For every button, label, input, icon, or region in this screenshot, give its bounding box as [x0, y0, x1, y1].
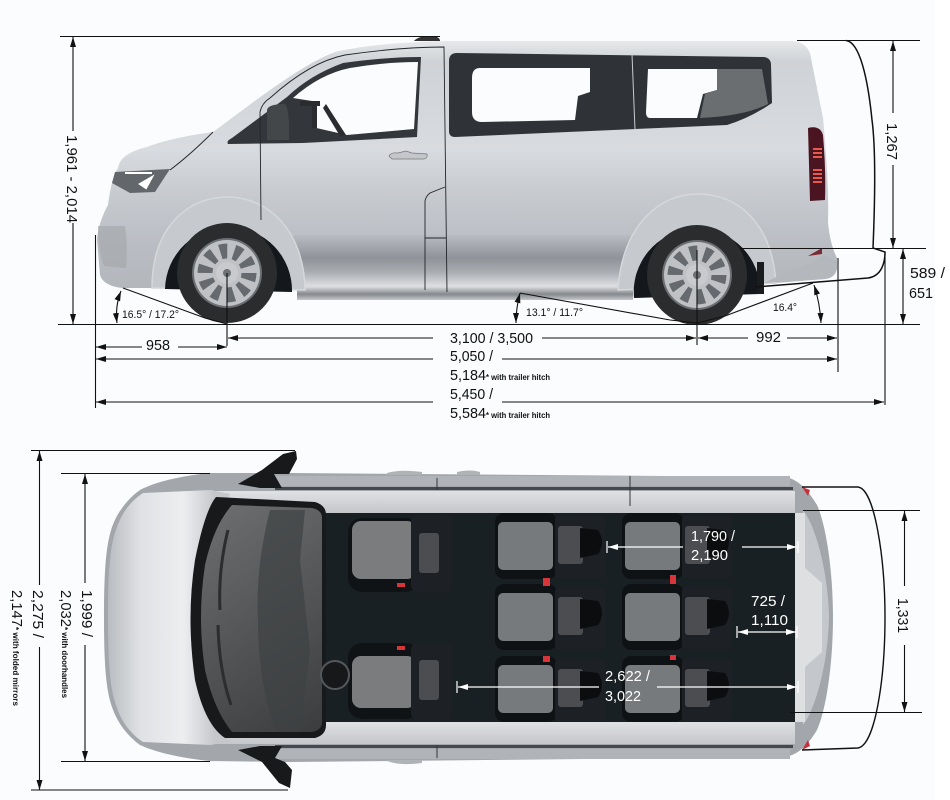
upper mirror: [238, 451, 297, 488]
label: folded mirrors: [8, 590, 25, 706]
front angle line: [123, 288, 227, 324]
label: folded mirrors: * with folded mirrors: [11, 627, 21, 706]
label: 1,331: 1,331: [894, 598, 911, 633]
front bumper grille: [98, 226, 127, 268]
side view dimension lines: [58, 36, 926, 408]
rear window glass: [646, 69, 717, 118]
steering wheel: [300, 101, 346, 136]
wiper marks: [218, 530, 231, 705]
rear overhang contour: [755, 40, 885, 287]
hood: [108, 490, 230, 745]
label: ramp angle: 13.1° / 11.7°: [526, 307, 583, 319]
third row seats: [622, 513, 732, 722]
front door window frame: [228, 57, 421, 144]
headlight glow: [125, 173, 152, 188]
front angle arrow: [116, 291, 121, 323]
rear side windows dark surround: [449, 53, 772, 137]
rear hatch inner: [795, 513, 822, 722]
dark trim lower: [275, 745, 793, 748]
length with extension arrows: [96, 401, 884, 403]
label: door handles: * with doorhandles: [60, 627, 70, 698]
label: front overhang: 958: [146, 337, 170, 354]
body outline top: [104, 473, 833, 762]
roof rail lower: [210, 722, 795, 744]
van body side: [97, 41, 837, 290]
cabin floor: [320, 513, 795, 722]
label: width with mirrors: 2,275 /: [29, 590, 46, 639]
headlight: [112, 169, 170, 193]
top view dimension lines: [31, 450, 922, 790]
label: 2,190: 2,190: [691, 547, 728, 564]
top view of van: [104, 451, 833, 788]
label: rear angle: 16.4°: [773, 302, 797, 314]
reference lines: [58, 36, 926, 408]
label: folded mirrors: 2,147: [8, 590, 25, 627]
middle window glass: [472, 68, 590, 122]
white arrow 725: [737, 626, 797, 638]
front overhang arrows: [96, 346, 227, 348]
label: 1,110: 1,110: [751, 612, 788, 629]
label: length with trailer hitch: * with trailer hitch: [486, 372, 550, 382]
door handle: [389, 151, 427, 159]
window divider: [632, 54, 635, 130]
windscreen frame: [190, 497, 326, 738]
height to roof arrow: [892, 41, 894, 248]
front seat lower: [348, 643, 452, 720]
label: length: 5,050 /: [450, 348, 494, 365]
outer side strip lower: [275, 749, 790, 759]
label: long length with trailer hitch: * with trailer hitch: [486, 410, 550, 420]
reference lines: [31, 450, 922, 790]
front wheel arch flare: [152, 197, 305, 290]
side sill: [297, 287, 633, 300]
rear wheel arch: [634, 229, 760, 298]
top view labels: [8, 528, 911, 706]
label: height: 1,961 - 2,014: [63, 135, 80, 223]
mudflap: [757, 262, 764, 294]
rear reflector: [808, 248, 822, 256]
label: long length: 5,450 /: [450, 386, 494, 403]
body width arrows: [84, 474, 86, 761]
rear overhang arrows: [698, 337, 837, 339]
outer side strip upper: [275, 476, 790, 486]
height arrows: [72, 37, 74, 324]
loading width arrows: [904, 511, 906, 712]
white arrow 2,622: [457, 681, 798, 693]
label: body width: 1,999 /: [78, 590, 95, 638]
rear contour: [802, 487, 885, 750]
label: 2,622: 2,622 /: [605, 668, 651, 685]
ramp angle line: [520, 293, 697, 323]
label: 725: 725 /: [751, 593, 786, 610]
white arrow 1,790: [607, 541, 798, 553]
door handles: [387, 470, 480, 764]
label: door handles: 2,032: [57, 590, 74, 627]
rear angle line: [697, 283, 813, 323]
label: 1,790: 1,790 /: [691, 528, 736, 545]
steering wheel: [321, 661, 349, 689]
label: door handles: [57, 590, 74, 698]
label: 1,267: 1,267: [883, 123, 900, 160]
rear wheel: [647, 225, 747, 325]
front wheel: [177, 223, 277, 323]
lower mirror: [238, 746, 292, 788]
wing mirror: [267, 104, 289, 140]
sill height arrow: [902, 249, 904, 324]
dark trim upper: [275, 487, 793, 490]
roof antenna: [414, 36, 440, 41]
front wheel arch: [165, 227, 292, 292]
tail light: [808, 127, 825, 201]
second row seats: [495, 513, 605, 722]
side view labels: [63, 123, 946, 422]
label: long length with trailer hitch: [450, 405, 550, 422]
label: length with trailer hitch: [450, 367, 550, 384]
tail light stripes: [813, 149, 822, 182]
label: front angle: 16.5° / 17.2°: [122, 309, 179, 321]
door seam: [437, 476, 630, 758]
overall width arrows: [38, 451, 40, 790]
windscreen glass: [201, 505, 322, 732]
rear lamps: [802, 487, 810, 750]
rear bumper: [764, 255, 837, 283]
lower door shading: [292, 235, 637, 290]
door cut lines: [170, 47, 447, 292]
front seat upper: [348, 515, 452, 592]
label: wheelbase: 3,100 / 3,500: [450, 330, 533, 347]
rear window interior: [700, 69, 768, 118]
length arrows: [96, 358, 837, 360]
front door window glass: [293, 62, 418, 135]
rear angle arrow: [814, 285, 821, 323]
wheelbase arrows: [228, 337, 696, 339]
seat belt clips: [397, 575, 676, 662]
label: 651: 651: [909, 285, 933, 302]
label: long length with trailer hitch: 5,584: [450, 405, 486, 422]
side view of van: [97, 36, 837, 325]
label: 589: 589 /: [910, 265, 946, 282]
roof rail upper: [210, 491, 795, 513]
label: length with trailer hitch: 5,184: [450, 367, 486, 384]
rear hatch outer: [803, 510, 829, 725]
label: rear overhang: 992: [756, 329, 781, 346]
rear wheel arch flare: [618, 194, 776, 290]
windscreen reflections: [258, 510, 310, 730]
label: 3,022: 3,022: [605, 688, 641, 705]
ramp angle arrow: [516, 293, 520, 323]
